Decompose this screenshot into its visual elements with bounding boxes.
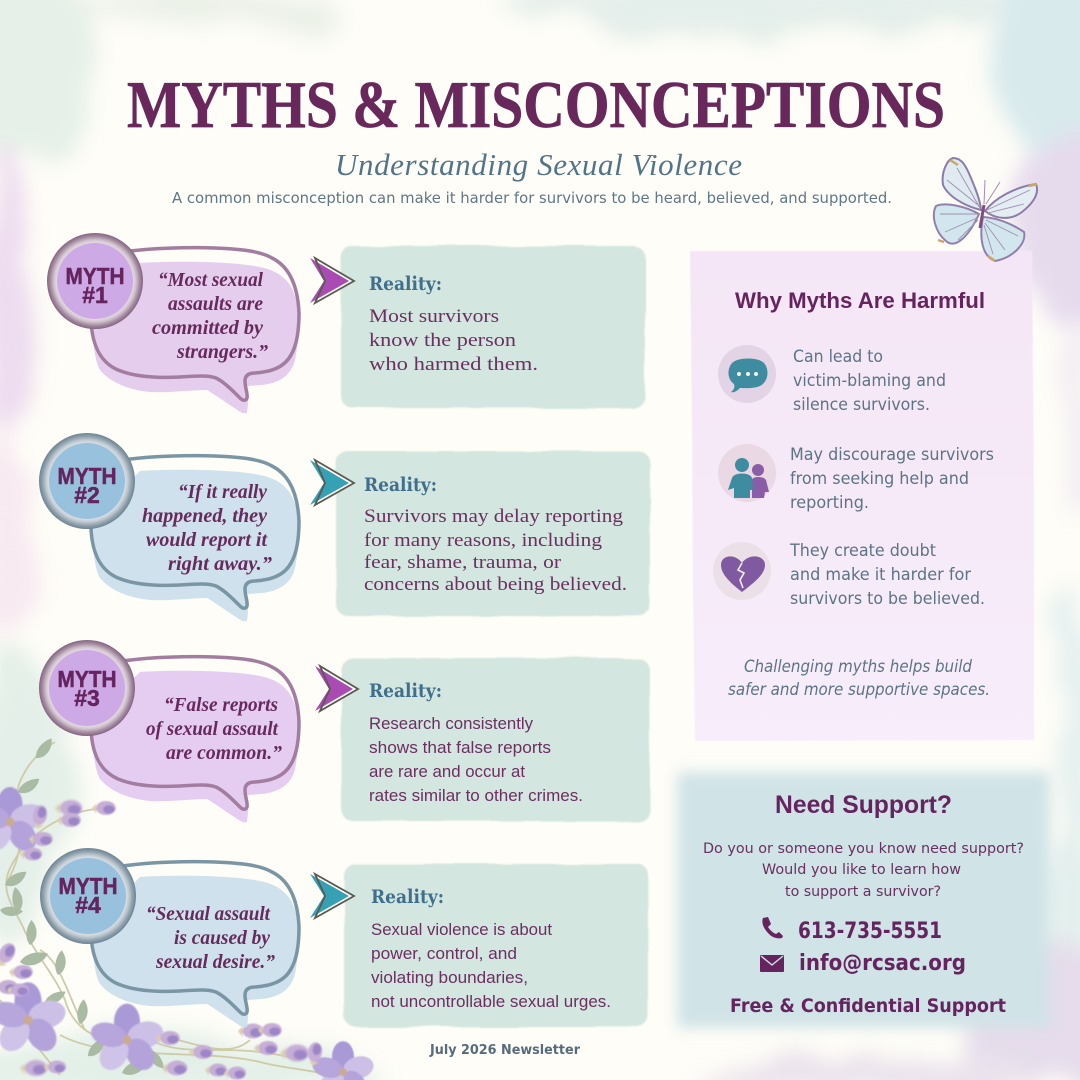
- reality panel 1: [341, 246, 645, 408]
- myth 2 quote: [142, 481, 272, 575]
- text: discourage survivors: reporting.: [790, 493, 869, 512]
- heading: why myths are harmful: Why Myths Are Harmful: [735, 288, 985, 313]
- reality panel 3: [341, 658, 649, 821]
- panel: why myths are harmful: [690, 251, 1034, 741]
- reality 1 heading: Reality:: [369, 273, 442, 295]
- reality 2 text: fear, shame, trauma, or: [364, 553, 561, 573]
- reality 4 text: Sexual violence is about: [371, 921, 552, 939]
- reality 1 text: [369, 307, 538, 375]
- text: create doubt: survivors to be believed.: [790, 589, 985, 608]
- myth 2 badge: MYTH: [58, 463, 116, 489]
- reality panel 2: [336, 451, 650, 616]
- subtitle: Understanding Sexual Violence: [335, 147, 742, 182]
- text: discourage survivors: from seeking help and: [790, 469, 969, 488]
- myth 2 quote: happened, they: [142, 505, 267, 527]
- myth 4 badge: [40, 848, 136, 944]
- myth 4 badge: #4: [75, 892, 101, 918]
- free and confidential: Free & Confidential Support: [730, 995, 1006, 1017]
- myth 3 quote: are common.”: [166, 742, 282, 764]
- myth 1 quote: [152, 269, 268, 363]
- reality 4 text: [371, 921, 611, 1011]
- text: discourage survivors: May discourage survivors: [790, 445, 994, 464]
- myth 2 badge: #2: [74, 482, 100, 508]
- reality 2 text: for many reasons, including: [364, 531, 602, 551]
- myth 4 quote: is caused by: [174, 927, 270, 949]
- icon: broken heart: [713, 542, 771, 600]
- reality 4 text: power, control, and: [371, 945, 517, 963]
- myth 2 badge: [39, 433, 135, 529]
- reality 1 text: Most survivors: [369, 307, 499, 327]
- myth 4 quote: “Sexual assault: [146, 903, 271, 925]
- reality 3 text: are rare and occur at: [369, 763, 525, 781]
- myth 4 quote: [146, 903, 275, 973]
- myth 1 quote: strangers.”: [176, 341, 268, 363]
- text: victim-blaming: Can lead to: [793, 347, 883, 366]
- myth 3: speech bubble: [39, 640, 299, 822]
- myth 4: speech bubble: [40, 848, 299, 1027]
- icon: envelope: [760, 955, 784, 972]
- myth 2 quote: “If it really: [178, 481, 267, 503]
- text: create doubt: [789, 541, 985, 608]
- intro sentence: A common misconception can make it harder for survivors to be heard, believed, and supported.: [172, 189, 892, 207]
- reality 3 text: Research consistently: [369, 715, 534, 733]
- support questions: Would you like to learn how: [762, 862, 961, 878]
- support questions: to support a survivor?: [785, 884, 941, 900]
- arrow 4: [310, 874, 354, 918]
- icon: phone: [762, 917, 783, 938]
- myth 1 quote: committed by: [152, 317, 263, 339]
- closing note: [728, 657, 990, 699]
- icon: speech bubble: [718, 345, 776, 403]
- title: MYTHS & MISCONCEPTIONS: [127, 68, 945, 142]
- reality 4 text: violating boundaries,: [371, 969, 528, 987]
- reality 3 text: rates similar to other crimes.: [369, 787, 583, 805]
- reality 2 text: [364, 507, 627, 595]
- text: create doubt: and make it harder for: [790, 565, 971, 584]
- footer: newsletter date: July 2026 Newsletter: [429, 1043, 581, 1058]
- support questions: Do you or someone you know need support?: [703, 841, 1024, 857]
- closing note: Challenging myths helps build: [744, 657, 972, 676]
- reality 3 text: [369, 715, 583, 805]
- myth 2 quote: would report it: [146, 529, 268, 551]
- reality 3 text: shows that false reports: [369, 739, 551, 757]
- myth 1 badge: MYTH: [66, 263, 124, 289]
- email address: info@rcsac.org: [799, 951, 966, 976]
- reality 2 text: Survivors may delay reporting: [364, 507, 623, 527]
- arrow 1: [310, 258, 354, 303]
- myth 1 badge: [47, 233, 143, 329]
- myth 2 quote: right away.”: [168, 553, 272, 575]
- text: victim-blaming: [793, 347, 946, 414]
- phone number: 613-735-5551: [798, 919, 942, 944]
- reality 4 text: not uncontrollable sexual urges.: [371, 993, 611, 1011]
- arrow 2: [310, 460, 354, 505]
- text: victim-blaming: victim-blaming and: [793, 371, 946, 390]
- myth 3 badge: #3: [74, 685, 100, 711]
- arrow 3: [315, 666, 358, 711]
- icon: butterfly: [934, 158, 1037, 261]
- myth 3 quote: of sexual assault: [146, 718, 279, 740]
- text: discourage survivors: [790, 445, 994, 512]
- reality 3 heading: Reality:: [369, 680, 442, 702]
- myth 3 quote: “False reports: [164, 694, 278, 716]
- heading: need support: Need Support?: [775, 791, 952, 819]
- myth 3 badge: [39, 640, 135, 736]
- closing note: safer and more supportive spaces.: [728, 680, 990, 699]
- text: victim-blaming: silence survivors.: [793, 395, 930, 414]
- myth 1: speech bubble: [47, 233, 299, 413]
- panel: need support: [677, 772, 1050, 1028]
- myth 4 quote: sexual desire.”: [155, 951, 275, 973]
- reality panel 4: [344, 864, 649, 1027]
- reality 2 text: concerns about being believed.: [364, 575, 627, 595]
- myth 1 quote: “Most sexual: [158, 269, 263, 291]
- reality 1 text: who harmed them.: [369, 355, 538, 375]
- reality 1 text: know the person: [369, 331, 516, 351]
- support questions: [703, 841, 1024, 900]
- text: create doubt: They create doubt: [789, 541, 937, 560]
- icon: two people: [718, 444, 776, 502]
- myth 2: speech bubble: [39, 433, 299, 621]
- myth 3 quote: [146, 694, 282, 764]
- myth 3 badge: MYTH: [58, 666, 116, 692]
- myth 4 badge: MYTH: [58, 873, 118, 899]
- floral decoration: [0, 737, 376, 1080]
- myth 1 badge: #1: [82, 282, 108, 308]
- reality 2 heading: Reality:: [364, 474, 437, 496]
- myth 1 quote: assaults are: [168, 293, 263, 315]
- reality 4 heading: Reality:: [371, 886, 444, 908]
